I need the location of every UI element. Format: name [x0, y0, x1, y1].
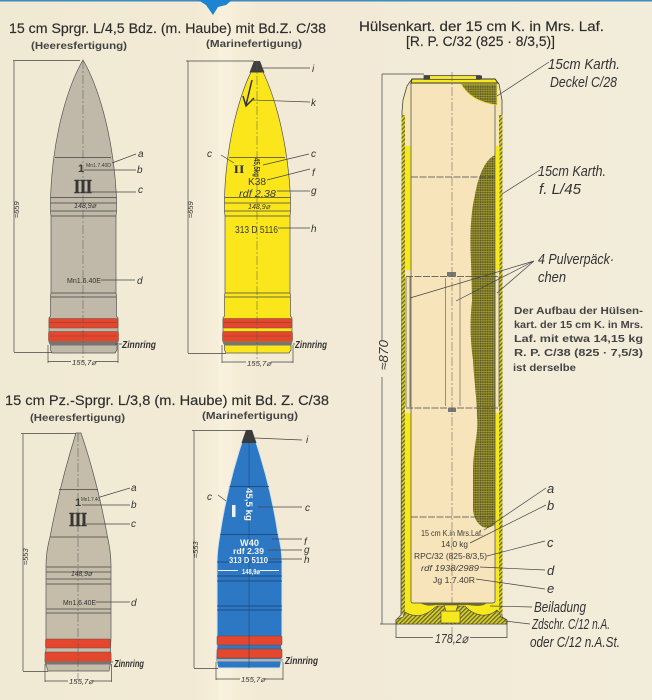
marking: 313 D 5116: 313 D 5116 — [235, 225, 278, 236]
dimension: height 553 right: ≈553 — [191, 541, 200, 558]
marking: 1 Mn 1.7.40 D: 1 — [78, 163, 84, 175]
nose cap: black — [250, 61, 264, 72]
marking: 45,5 kg: 45,5 kg — [244, 488, 254, 521]
marking: 1 Mn 1.7.40 D: Mn1.7.40D — [86, 163, 111, 169]
label: Zinnring bottom right: Zinnring — [284, 656, 318, 667]
dimension: height 659 right — [186, 61, 254, 354]
dimension: 155,7 left — [48, 345, 118, 367]
heading: first shell type: 15 cm Sprgr. L/4,5 Bdz. (m. Haube) mit Bd.Z. C/38 — [9, 21, 326, 36]
leader lines and letters: yellow shell: c — [311, 149, 316, 160]
marking: 148,9 diameter: 148,9⌀ — [248, 202, 271, 211]
leader lines and letters: grey shell bottom: c — [131, 519, 136, 530]
heading: cartridge case — [359, 19, 604, 49]
label: 4 Pulverpäckchen — [410, 251, 614, 301]
leader lines and letters: blue shell: f — [304, 537, 308, 548]
case markings: RPC/32 (825-8/3,5) — [414, 552, 487, 561]
leader lines and letters: blue shell: h — [304, 555, 310, 566]
case markings: 14,0 kg — [441, 540, 468, 549]
marking: 313 D 5110: 313 D 5110 — [229, 555, 268, 565]
label: 4 Pulverpäckchen: 4 Pulverpäck· — [538, 251, 614, 268]
leader lines and letters: grey shell bottom: b — [131, 500, 137, 511]
marking: 1 Mn 1.7.40: Mn1.7.40 — [81, 497, 100, 503]
hatched cut-away: propellant bag — [470, 155, 495, 528]
leader lines and letters: blue shell: c — [207, 492, 212, 503]
leader lines and letters: grey shell bottom: d — [131, 598, 137, 609]
text block: note on case construction: ist derselbe — [513, 363, 576, 374]
dimension: 155,7 right — [222, 345, 293, 368]
leader lines and letters a to e: c — [547, 535, 554, 550]
text block: note on case construction: kart. der 15 cm K. in Mrs. — [514, 320, 643, 331]
label: 15cm Karth. f. L/45: 15cm Karth. — [538, 163, 606, 180]
dimension: 155,7 bottom left: 155,7⌀ — [69, 677, 95, 686]
leader lines and letters: yellow shell: f — [312, 168, 316, 179]
shell: blue Marinefertigung L/3,8 — [191, 430, 318, 684]
label: Beiladung: Beiladung — [534, 599, 587, 616]
blue edge strip at top — [0, 0, 652, 15]
dimension: 155,7 bottom left — [45, 664, 112, 686]
dimension: height 870 — [376, 74, 424, 624]
marking: 1 Mn 1.7.40 D — [78, 163, 111, 175]
marking: 148,9 diameter: 148,9⌀ — [74, 201, 97, 210]
leader lines and letters: grey shell: c — [138, 185, 143, 196]
leader lines and letters: blue shell: i — [306, 435, 309, 446]
leader lines and letters: yellow shell: g — [311, 186, 317, 197]
dimension: height 659 right: ≈659 — [186, 201, 195, 218]
nose cap: black — [242, 430, 256, 443]
leader lines and letters: grey shell: d — [137, 276, 143, 287]
label: 15cm Karth. Deckel C/28: 15cm Karth. — [548, 56, 620, 73]
heading: second shell type: 15 cm Pz.-Sprgr. L/3,8 (m. Haube) mit Bd. Z. C/38 — [5, 393, 329, 408]
marking: rdf 2.38: rdf 2.38 — [239, 189, 276, 200]
marking: 45,5 kg: 45,5kg — [252, 158, 262, 177]
shell: grey Heeresfertigung L/4,5 — [12, 60, 156, 367]
leader lines and letters: yellow shell — [207, 64, 317, 344]
heading: cartridge case: [R. P. C/32 (825 · 8/3,5)] — [406, 34, 555, 49]
marking: III: III — [69, 509, 87, 531]
label: Zinnring right: Zinnring — [294, 340, 327, 351]
leader lines and letters: grey shell — [84, 149, 144, 344]
dimension: 178,2: 178,2⌀ — [435, 631, 469, 646]
leader lines and letters: grey shell bottom — [82, 483, 137, 662]
dashed separators — [411, 176, 495, 178]
subheading: Marinefertigung bottom: (Marinefertigung) — [202, 411, 298, 422]
leader lines and letters: grey shell: b — [137, 165, 143, 176]
marking: Mn 1.6.40 E: Mn1.6.40E — [63, 598, 96, 607]
label: Beiladung — [490, 599, 587, 616]
dimension: 155,7 right: 155,7⌀ — [247, 359, 273, 368]
leader lines and letters: blue shell: g — [304, 545, 310, 556]
dimension: height 553 right — [191, 430, 246, 668]
dimension: height 553 left — [21, 434, 76, 672]
label: 15cm Karth. Deckel C/28: Deckel C/28 — [550, 74, 618, 91]
subheading: Marinefertigung top: (Marinefertigung) — [206, 39, 302, 50]
label: 15cm Karth. f. L/45: f. L/45 — [539, 181, 582, 198]
heading: cartridge case: Hülsenkart. der 15 cm K. in Mrs. Laf. — [359, 19, 604, 34]
dimension: height 553 left: ≈553 — [21, 548, 30, 565]
text block: note on case construction: Laf. mit etwa 14,15 kg — [514, 334, 643, 345]
leader lines and letters: yellow shell: c — [207, 149, 212, 160]
case markings — [414, 529, 487, 585]
marking: 148,9 diameter — [218, 569, 279, 576]
label: 15cm Karth. f. L/45 — [502, 163, 606, 198]
marking: 148,9 diameter: 148,9⌀ — [242, 569, 261, 576]
cover lid — [411, 76, 498, 83]
subheading: Heeresfertigung top: (Heeresfertigung) — [31, 41, 127, 52]
shell: grey Heeresfertigung L/3,8 — [21, 433, 144, 686]
label: Zdschr. C/12 n.A. oder C/12 n.A.St. — [505, 616, 620, 651]
base and primer — [396, 603, 507, 624]
marking: 1 Mn 1.7.40: 1 — [75, 497, 81, 509]
leader lines and letters: grey shell: a — [138, 149, 144, 160]
text block: note on case construction: R. P. C/38 (825 · 7,5/3) — [514, 348, 643, 359]
label: 4 Pulverpäckchen: chen — [538, 269, 566, 286]
dimension: 155,7 bottom right — [216, 662, 283, 684]
label: Zdschr. C/12 n.A. oder C/12 n.A.St.: Zdschr. C/12 n.A. — [531, 616, 610, 633]
dimension: 155,7 bottom right: 155,7⌀ — [241, 675, 267, 684]
shell: yellow Marinefertigung L/4,5 — [186, 61, 327, 368]
hatched cut-away: lid area — [461, 84, 497, 105]
dimension: height 870: ≈870 — [376, 339, 391, 370]
label: Zdschr. C/12 n.A. oder C/12 n.A.St.: oder C/12 n.A.St. — [530, 634, 620, 651]
case walls — [396, 79, 507, 624]
yellow side strips — [405, 146, 500, 616]
dimension: height 659 left — [12, 60, 80, 352]
subheading: Heeresfertigung bottom: (Heeresfertigung) — [30, 413, 125, 424]
leader lines and letters a to e: e — [547, 581, 554, 596]
dimension: 178,2 — [396, 624, 507, 646]
leader lines and letters: blue shell — [207, 435, 310, 566]
case markings: 15 cm K.in Mrs.Laf. — [421, 529, 483, 538]
marking: Mn 1.6.40 E: Mn1.6.40E — [67, 276, 101, 285]
leader lines and letters a to e — [470, 481, 555, 596]
dimension: height 659 left: ≈659 — [12, 201, 21, 218]
text block: note on case construction — [513, 306, 643, 374]
icon: arrow on nose — [243, 80, 254, 106]
leader lines and letters: yellow shell: h — [311, 224, 317, 235]
marking: W 40: W40 — [240, 538, 259, 548]
powder fill interior — [411, 83, 495, 603]
label: Zinnring left: Zinnring — [121, 340, 156, 351]
label: Zinnring bottom left: Zinnring — [113, 659, 144, 670]
marking: III: III — [74, 176, 92, 198]
leader lines and letters a to e: a — [547, 481, 554, 496]
marking: 1 Mn 1.7.40 — [75, 497, 100, 509]
marking: rdf 2.39: rdf 2.39 — [233, 547, 265, 556]
dimension: 155,7 left: 155,7⌀ — [72, 358, 98, 367]
cartridge case cross-section — [396, 72, 507, 640]
case markings: Jg 1.7.40R — [433, 576, 475, 585]
marking: II: II — [234, 162, 245, 176]
leader lines and letters a to e: d — [547, 563, 555, 578]
powder packet tube — [406, 272, 499, 412]
leader lines and letters a to e: b — [547, 498, 554, 513]
case markings: rdf 1938/2989 — [421, 564, 480, 573]
marking: K38: K38 — [248, 177, 266, 188]
centre fold — [218, 0, 232, 700]
leader lines and letters: yellow shell: i — [312, 64, 315, 75]
marking: I — [232, 505, 236, 517]
leader lines and letters: blue shell: c — [305, 503, 310, 514]
leader lines and letters: yellow shell: k — [311, 98, 317, 109]
text block: note on case construction: Der Aufbau der Hülsen- — [514, 306, 643, 317]
leader lines and letters: grey shell bottom: a — [131, 483, 137, 494]
marking: 148,9 diameter: 148,9⌀ — [71, 569, 93, 578]
label: 15cm Karth. Deckel C/28 — [497, 56, 620, 96]
